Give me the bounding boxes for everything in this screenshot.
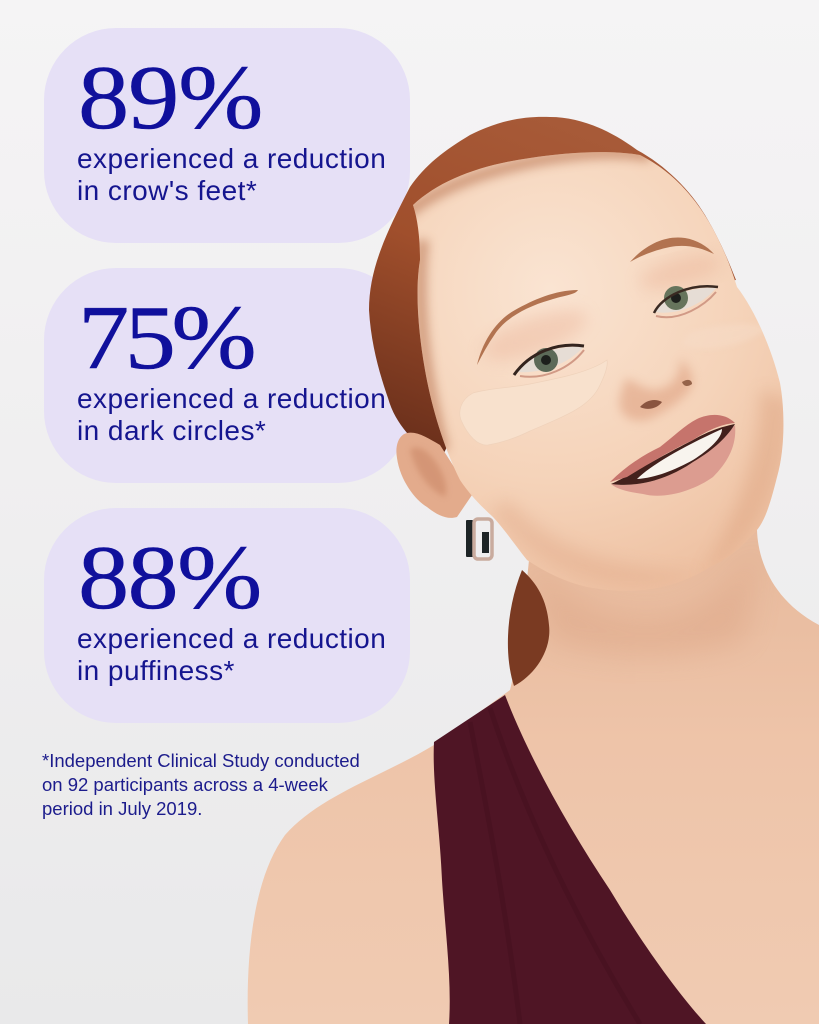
burgundy top <box>434 695 706 1024</box>
eye socket shade right <box>642 255 716 290</box>
stat text: dark circles: in dark circles* <box>77 415 266 446</box>
mouth <box>610 415 735 496</box>
stat number: 75%: 75% <box>78 287 252 388</box>
right eyebrow <box>630 237 714 262</box>
stat text: dark circles: experienced a reduction <box>77 383 386 414</box>
right eye <box>654 286 718 317</box>
ponytail <box>508 570 549 686</box>
footnote: on 92 participants across a 4-week <box>42 774 328 795</box>
stat text: puffiness: in puffiness* <box>77 655 235 686</box>
lower lip <box>611 425 735 496</box>
hairline blend <box>405 153 650 450</box>
upper lip <box>610 415 735 482</box>
teeth <box>637 429 722 479</box>
nose <box>619 358 693 421</box>
stat number: 88%: 88% <box>78 527 261 628</box>
footnote: *Independent Clinical Study conducted <box>42 750 360 771</box>
footnote <box>42 750 360 819</box>
stat text: puffiness <box>77 623 386 686</box>
illustration: smiling woman wearing under-eye patches <box>248 116 819 1024</box>
panel: crow's feet stat <box>44 28 410 243</box>
eye socket shade left <box>484 308 586 362</box>
stat text: puffiness: experienced a reduction <box>77 623 386 654</box>
ear <box>396 433 472 518</box>
right cheek shade <box>714 392 784 562</box>
hair <box>369 117 736 457</box>
under-eye patch right <box>743 328 760 336</box>
mouth interior <box>611 424 735 485</box>
stat text: crow's feet: experienced a reduction <box>77 143 386 174</box>
neck shadow under jaw <box>546 582 748 655</box>
face <box>413 152 784 586</box>
shoulder and chest <box>240 500 819 1024</box>
left eyebrow <box>477 290 578 365</box>
hoop earring <box>466 519 492 559</box>
panel: dark circles stat <box>44 268 410 483</box>
panel: puffiness stat <box>44 508 410 723</box>
stat text: crow's feet <box>77 143 386 206</box>
stat text: crow's feet: in crow's feet* <box>77 175 257 206</box>
stat number: 89%: 89% <box>78 47 262 148</box>
left eye <box>514 345 584 377</box>
stat text: dark circles <box>77 383 386 446</box>
under-eye patch left <box>460 360 607 445</box>
footnote: period in July 2019. <box>42 798 202 819</box>
jaw shade <box>495 502 652 582</box>
